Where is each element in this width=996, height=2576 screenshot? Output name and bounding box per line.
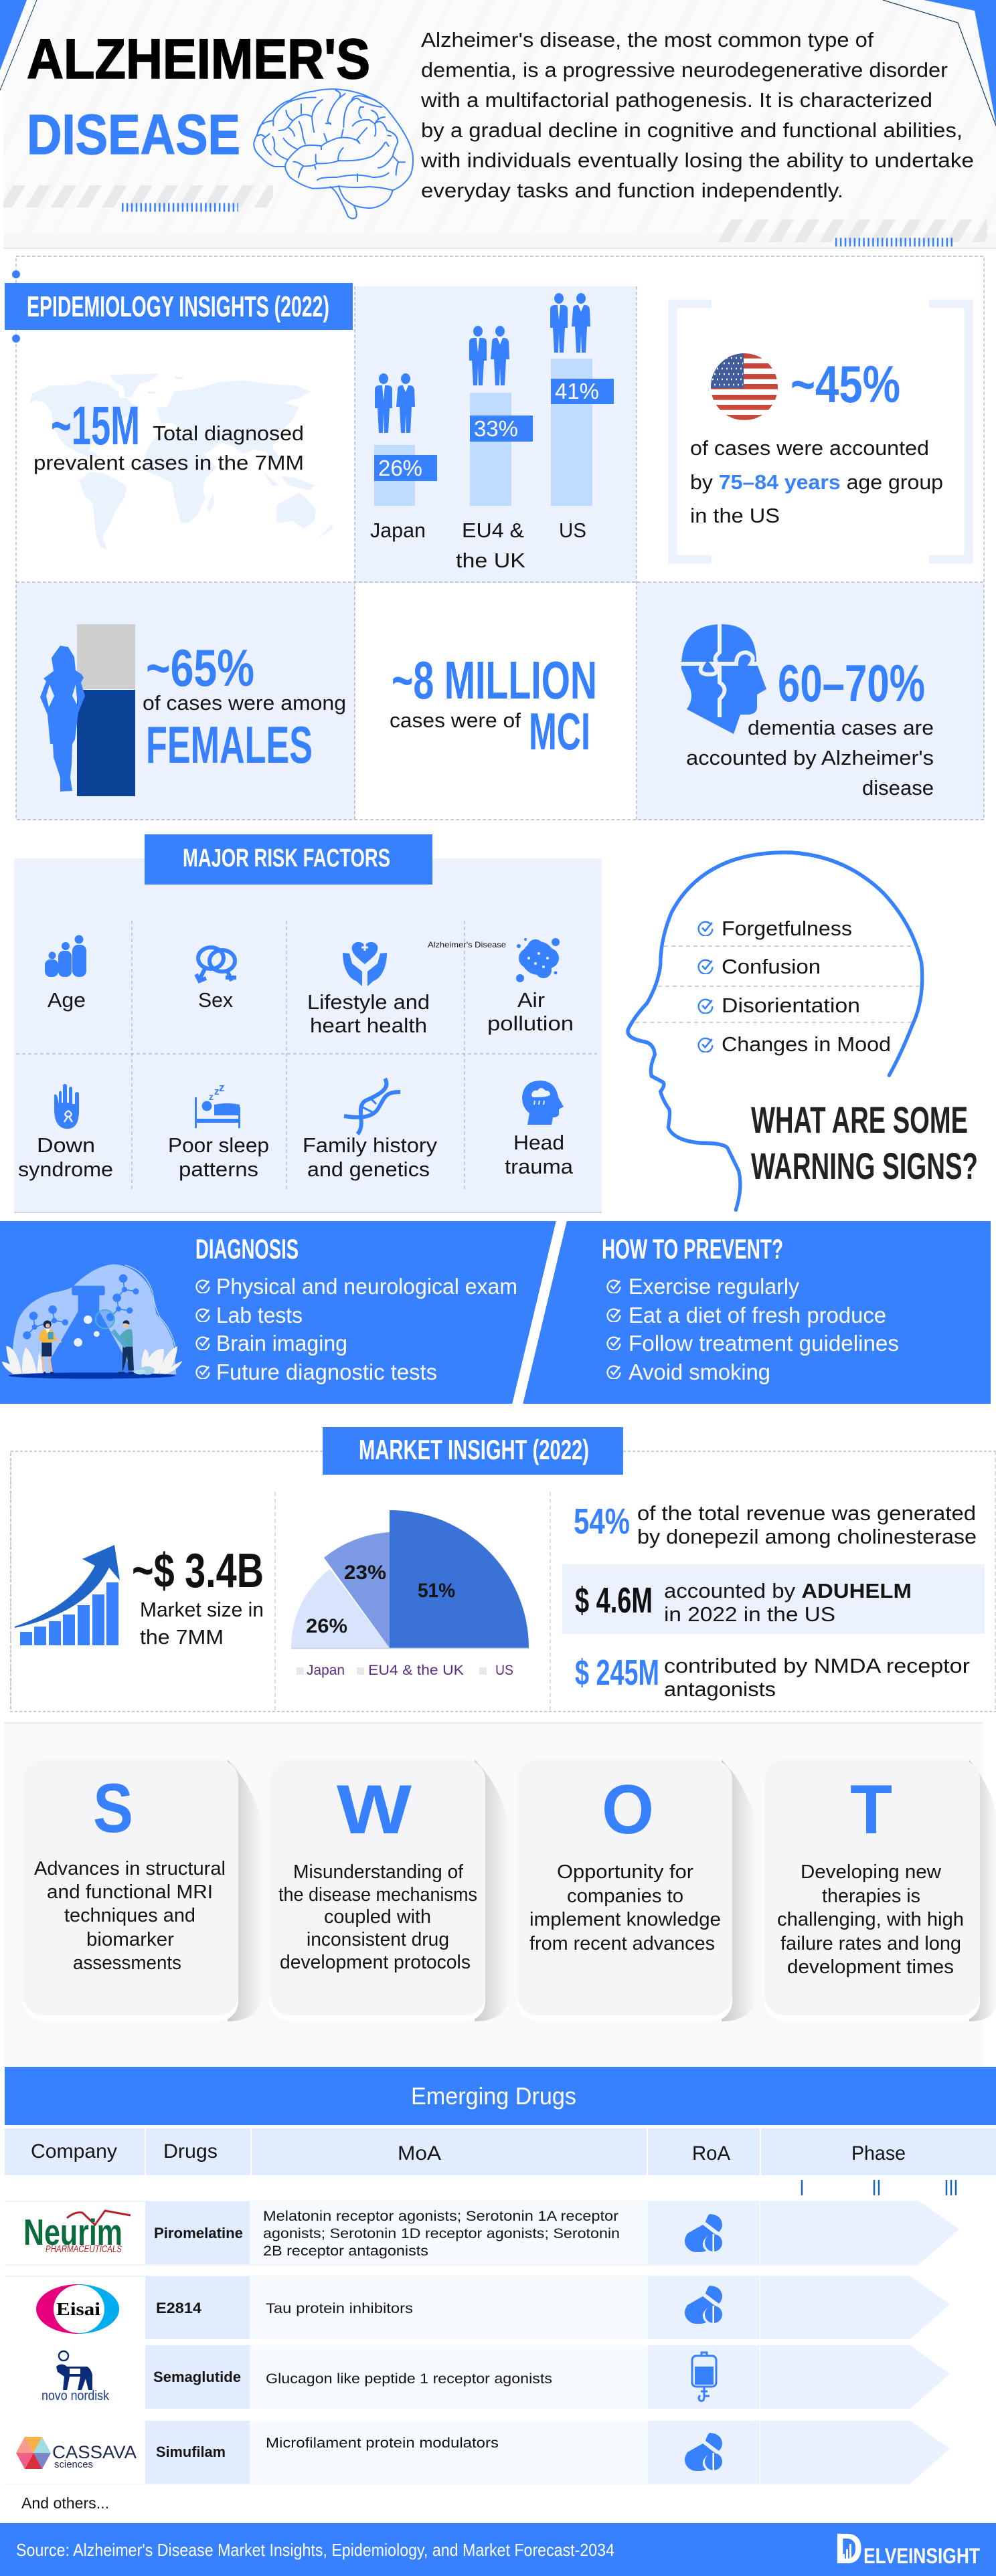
stat: 4.6M Aduhelm: accounted by ADUHELM [664,1579,912,1602]
stat: 54% donepezil: by donepezil among cholinesterase [637,1525,977,1548]
row: Neurim Piromelatine: Melatonin receptor agonists; Serotonin 1A receptor [263,2209,618,2224]
prevention list [602,1233,899,1384]
stat: 60-70% dementia [681,624,934,800]
logo: Eisai [36,2284,119,2334]
stat: 245M NMDA: contributed by NMDA receptor [664,1654,970,1677]
stat: 245M NMDA: $ 245M [575,1653,659,1693]
risk: head trauma: trauma [505,1155,574,1178]
stat: 8 million MCI [390,650,597,761]
risk: down syndrome [18,1084,113,1181]
panel: SWOT [4,1723,996,2067]
bar chart: cases by region: EU4 & [462,519,524,542]
card: weaknesses: coupled with [324,1906,431,1928]
heading: warning signs [751,1099,978,1187]
row: Eisai E2814: E2814 [156,2300,202,2316]
warning list [699,917,891,1056]
intro paragraph: with a multifactorial pathogenesis. It is characterized [420,88,932,112]
risk: poor sleep patterns: Poor sleep [168,1133,269,1157]
prevention list: HOW TO PREVENT? [602,1233,783,1265]
card: threats: Developing new [801,1861,942,1883]
intro paragraph: dementia, is a progressive neurodegenerative disorder [421,58,948,82]
logo: DelveInsight: D [835,2524,863,2573]
chart: market share rose: 51% [418,1580,455,1602]
row: Eisai E2814: Tau protein inhibitors [266,2301,413,2316]
risk: poor sleep patterns [168,1081,269,1181]
table header row: Company [31,2140,117,2163]
heading: epidemiology insights: EPIDEMIOLOGY INSIGHTS (2022) [27,290,329,323]
stat: 45% aged 75-84 with brackets: by 75–84 years age group [690,470,943,494]
risk: down syndrome: Down [37,1133,95,1157]
prevention list: Exercise regularly [629,1274,799,1299]
stat: market size [132,1544,264,1649]
stat: 45% aged 75-84 with brackets [673,304,969,559]
row: Neurim Piromelatine: 2B receptor antagonists [263,2243,428,2259]
chart: market share rose [291,1510,529,1678]
card: opportunities: implement knowledge [529,1909,721,1930]
card: opportunities [517,1760,756,2021]
source text: Source: Alzheimer's Disease Market Insights, Epidemiology, and Market Forecast-2034 [16,2540,614,2560]
diagnosis list: Brain imaging [216,1331,347,1356]
intro paragraph: with individuals eventually losing the ability to undertake [420,149,974,172]
table header row: MoA [398,2142,441,2165]
prevention list: Avoid smoking [629,1360,770,1384]
illustration: scientists and flask [2,1264,183,1379]
panel: warning signs [628,852,978,1210]
prevention list: Follow treatment guidelines [629,1331,899,1356]
stat: 15M diagnosed: Total diagnosed [153,422,304,445]
diagnosis list [195,1233,517,1384]
icon: puzzle head [681,624,766,734]
card: threats: therapies is [822,1885,920,1907]
icon: woman silhouette [40,646,85,792]
risk: family history and genetics [303,1079,438,1181]
panel: emerging drugs table [5,2067,996,2512]
chart legend: Japan [307,1663,345,1678]
card: weaknesses [270,1760,509,2021]
note: and others: And others... [21,2494,109,2512]
card: weaknesses: the disease mechanisms [278,1884,477,1906]
bar chart: cases by region: 33% [474,416,518,441]
risk: air pollution: Air [517,988,545,1012]
card: opportunities: from recent advances [529,1933,715,1954]
stat: 8 million MCI: MCI [529,702,590,761]
row: Neurim Piromelatine: agonists; Serotonin 1D receptor agonists; Serotonin [263,2226,620,2241]
risk: head trauma: Head [513,1131,564,1154]
card: threats: T [850,1771,892,1849]
stat: 8 million MCI: ~8 MILLION [392,650,597,710]
stat: 245M NMDA [575,1653,970,1701]
icon: rising bar chart with arrow [15,1545,120,1645]
row: Novo Nordisk Semaglutide: Glucagon like peptide 1 receptor agonists [266,2371,552,2387]
chart legend: EU4 & the UK [368,1663,464,1678]
logo: Novo Nordisk: novo nordisk [42,2389,110,2403]
heading: market insight [323,1427,623,1475]
risk: air pollution: pollution [487,1012,574,1035]
stat: 60-70% dementia: disease [862,776,934,800]
row: Novo Nordisk Semaglutide [42,2345,950,2409]
chart legend: US [495,1663,513,1678]
heading: major risk factors [145,834,432,885]
card: weaknesses: Misunderstanding of [293,1861,464,1883]
warning list: Confusion [722,955,821,978]
panel: diagnosis and prevention [0,1220,991,1404]
world map [29,373,333,550]
stat: 15M diagnosed [33,395,304,474]
panel: market insight [11,1427,996,1712]
risk: poor sleep patterns: patterns [179,1158,258,1181]
bar chart: cases by region: the UK [456,549,525,572]
warning list: Forgetfulness [722,917,852,940]
table header row [5,2126,996,2176]
card: strengths [23,1760,262,2021]
stat: 65% females: of cases were among [143,691,346,715]
card: strengths: assessments [73,1952,181,1974]
card: threats: development times [787,1956,954,1978]
warning list: Disorientation [722,994,860,1017]
row: Neurim Piromelatine [5,2201,959,2265]
card: threats: challenging, with high [777,1909,964,1930]
stat: 4.6M Aduhelm: in 2022 in the US [664,1602,835,1626]
row: Cassava Simufilam: Simufilam [156,2444,226,2460]
logo: Cassava Sciences: sciences [54,2459,93,2470]
stat: 54% donepezil: 54% [574,1501,630,1542]
stat: 60-70% dementia: accounted by Alzheimer's [686,746,934,769]
row: Cassava Simufilam: Microfilament protein modulators [266,2435,499,2451]
stat: market size: Market size in [140,1598,264,1621]
row: Eisai E2814 [5,2276,950,2339]
card: weaknesses: inconsistent drug [307,1929,449,1950]
row: Neurim Piromelatine: Piromelatine [154,2225,243,2241]
logo: Neurim: PHARMACEUTICALS [46,2243,122,2255]
card: weaknesses: W [337,1771,412,1849]
bar chart: cases by region: Japan [370,519,426,542]
bar chart: cases by region: 41% [555,379,599,403]
stat: 245M NMDA: antagonists [664,1677,776,1701]
header panel [0,0,996,248]
stat: 45% aged 75-84 with brackets: ~45% [791,355,900,413]
bar chart: cases by region [370,293,614,572]
logo: Cassava Sciences: CASSAVA [52,2442,137,2462]
logo: Novo Nordisk [42,2351,110,2403]
risk: family history and genetics: and genetics [307,1158,430,1181]
icon: IV bag [692,2353,716,2401]
chart legend [297,1663,513,1678]
panel: major risk factors [14,834,602,1212]
card: strengths: techniques and [64,1905,195,1926]
risk: lifestyle and heart health: Lifestyle and [307,990,430,1014]
stat: 4.6M Aduhelm [562,1564,985,1634]
phase markers [802,2180,956,2195]
row: Cassava Simufilam [5,2421,950,2484]
stat: market size: the 7MM [140,1625,224,1649]
card: strengths: biomarker [86,1929,174,1950]
chart: market share rose: 23% [344,1562,386,1584]
title: Alzheimer's: ALZHEIMER'S [27,27,370,90]
card: threats [764,1760,996,2021]
risk: head trauma [505,1081,574,1178]
chart: market share rose: 26% [306,1615,347,1637]
logo: Neurim: Neurim [23,2211,122,2253]
stat: 60-70% dementia: dementia cases are [748,716,934,739]
stat: 65% females: FEMALES [146,715,313,774]
intro paragraph [420,28,974,202]
diagnosis list: DIAGNOSIS [195,1233,299,1265]
logo: Eisai: Eisai [56,2299,101,2319]
card: strengths: Advances in structural [34,1858,226,1879]
prevention list: Eat a diet of fresh produce [629,1303,886,1327]
stat: 45% aged 75-84 with brackets: in the US [690,504,780,527]
small caption: Alzheimer's Disease: Alzheimer's Disease [428,940,506,949]
logo: Cassava Sciences [16,2437,137,2470]
risk: poor sleep patterns: z [214,1086,220,1097]
table title [5,2067,996,2125]
stat: 4.6M Aduhelm: $ 4.6M [575,1580,653,1621]
intro paragraph: by a gradual decline in cognitive and functional abilities, [421,118,963,142]
stat: 65% females [40,624,346,796]
warning list: Changes in Mood [722,1032,891,1056]
risk: down syndrome: syndrome [18,1158,113,1181]
risk: family history and genetics: Family history [303,1133,438,1157]
bar chart: cases by region: US [559,519,586,542]
icon: oral pills [685,2214,722,2252]
title: disease: DISEASE [27,103,240,166]
risk: age [45,935,86,1012]
risk: poor sleep patterns: z [209,1091,214,1102]
stat: 15M diagnosed: prevalent cases in the 7MM [33,451,304,474]
footer [0,2523,996,2576]
risk: sex [196,947,236,1012]
stat: 54% donepezil [574,1501,977,1548]
table header row: Drugs [163,2140,218,2163]
row: Novo Nordisk Semaglutide: Semaglutide [153,2369,241,2385]
card: opportunities: O [602,1771,654,1849]
risk: poor sleep patterns: z [219,1081,225,1094]
risk: lifestyle and heart health: heart health [310,1014,427,1037]
bar chart: cases by region: 26% [378,456,422,480]
card: strengths: and functional MRI [47,1881,213,1903]
intro paragraph: Alzheimer's disease, the most common type of [421,28,874,52]
diagnosis list: Lab tests [216,1303,303,1327]
panel: epidemiology insights [5,256,984,820]
table header row: Phase [851,2142,906,2165]
stat: 8 million MCI: cases were of [390,709,521,732]
table title: Emerging Drugs [411,2082,576,2110]
card: opportunities: companies to [567,1885,683,1907]
risk: age: Age [48,988,86,1012]
risk: air pollution [487,938,574,1035]
heading: major risk factors: MAJOR RISK FACTORS [183,844,390,872]
stat: 65% females: ~65% [146,638,254,697]
heading: epidemiology insights [5,283,353,330]
diagnosis list: Physical and neurological exam [216,1274,517,1299]
icon: brain [254,89,413,219]
icon: oral pills [685,2433,722,2471]
intro paragraph: everyday tasks and function independently. [421,179,843,202]
heading: market insight: MARKET INSIGHT (2022) [359,1434,589,1465]
stat: 15M diagnosed: ~15M [51,395,140,456]
risk: sex: Sex [198,988,233,1012]
card: weaknesses: development protocols [280,1952,471,1973]
stat: 54% donepezil: of the total revenue was generated [637,1501,976,1525]
card: threats: failure rates and long [780,1933,961,1954]
head outline [628,852,922,1210]
icon: US flag [711,353,778,420]
table header row: RoA [692,2142,730,2165]
icon: oral pills [685,2286,722,2324]
stat: market size: ~$ 3.4B [132,1544,264,1598]
stat: 45% aged 75-84 with brackets: of cases were accounted [690,436,929,460]
card: opportunities: Opportunity for [557,1861,693,1883]
diagnosis list: Future diagnostic tests [216,1360,437,1384]
logo: DelveInsight [835,2524,980,2573]
card: strengths: S [93,1770,133,1847]
stat: 60-70% dementia: 60–70% [778,654,925,713]
risk: lifestyle and heart health [307,942,430,1037]
